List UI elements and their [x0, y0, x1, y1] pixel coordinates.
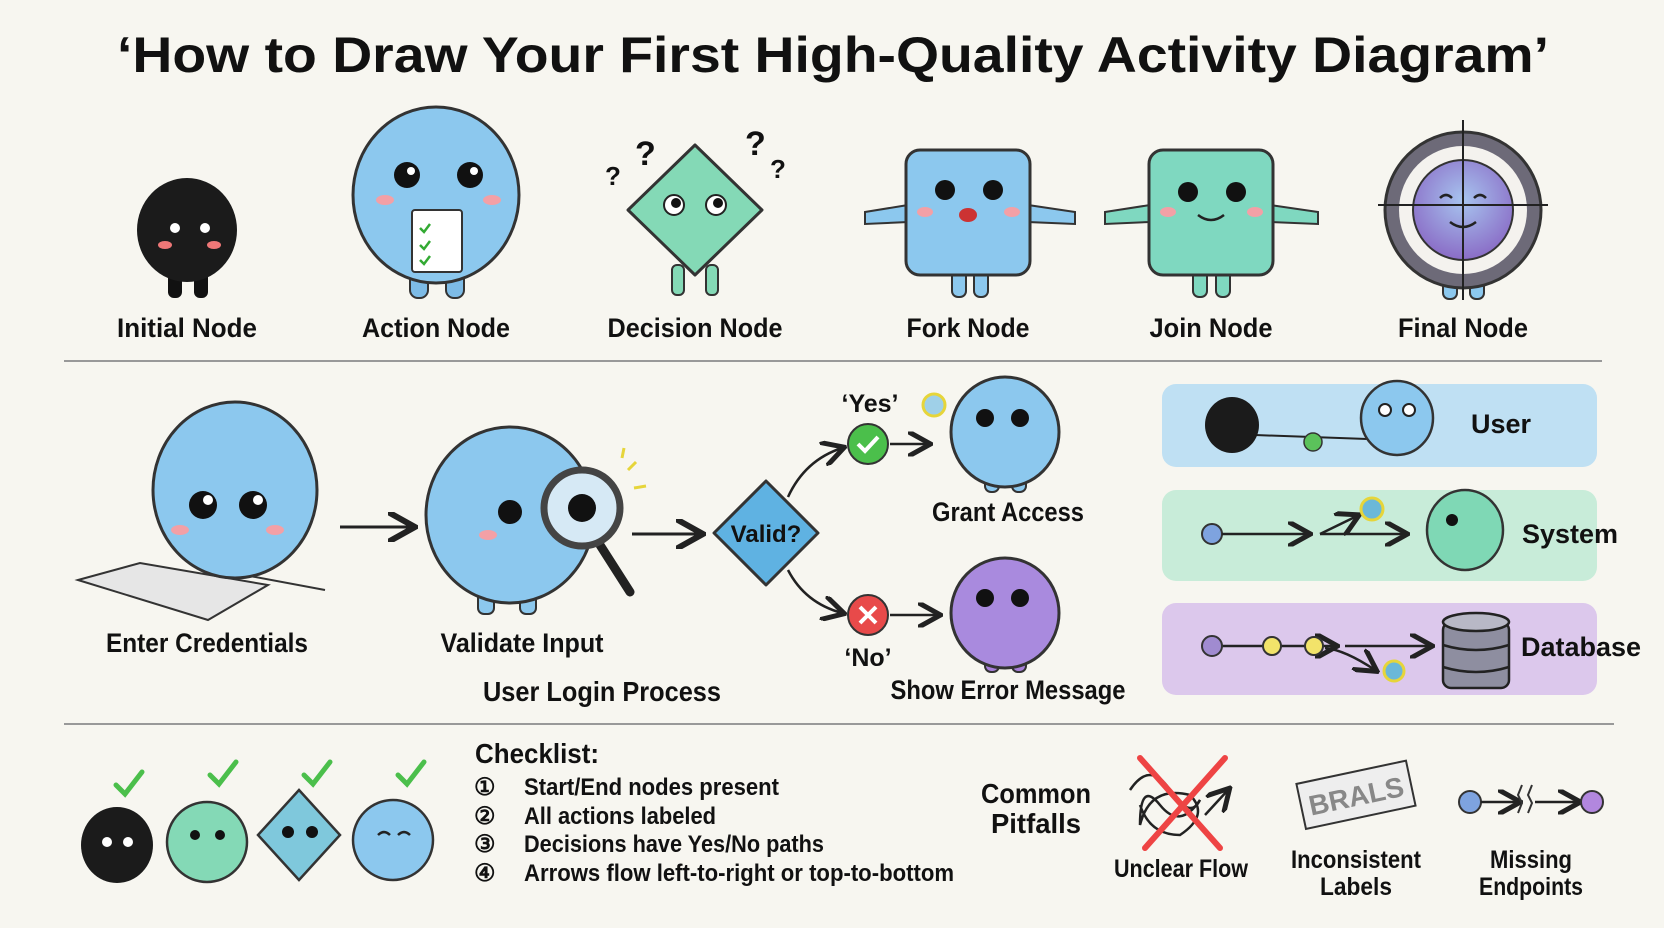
label: action node: Action Node — [362, 313, 510, 343]
common pitfalls: Common — [981, 778, 1091, 809]
character: validate input — [426, 427, 646, 614]
character: initial node — [137, 178, 237, 298]
checklist: Checklist: — [475, 738, 599, 769]
character: action node — [353, 107, 519, 298]
label: show error message: Show Error Message — [890, 675, 1126, 705]
icon: inconsistent labels: BRALS — [1306, 771, 1407, 821]
icon: unclear flow — [1130, 758, 1228, 848]
common pitfalls: Labels — [1320, 873, 1392, 901]
checklist: Arrows flow left-to-right or top-to-bottom — [524, 860, 954, 887]
character: decision node — [605, 125, 786, 295]
label: yes: ‘Yes’ — [842, 390, 898, 418]
arrow: yes branch — [788, 448, 842, 497]
lane: system — [1162, 490, 1618, 581]
checklist: ④ — [474, 860, 496, 887]
label: grant access: Grant Access — [932, 497, 1084, 527]
character: enter credentials — [78, 402, 325, 620]
label: user login process: User Login Process — [483, 676, 721, 707]
icon: inconsistent labels — [1296, 761, 1416, 829]
common pitfalls: Pitfalls — [991, 808, 1081, 839]
character: decision node: ? — [635, 135, 656, 173]
arrow: no branch — [788, 570, 842, 613]
checklist: Start/End nodes present — [524, 774, 779, 801]
label: final node: Final Node — [1398, 313, 1528, 343]
lane: database: Database — [1521, 632, 1641, 662]
lane: database — [1162, 603, 1641, 695]
character: decision node: ? — [605, 161, 621, 191]
label: decision node: Decision Node — [608, 313, 782, 343]
common pitfalls: Missing — [1490, 846, 1572, 874]
common pitfalls: Unclear Flow — [1114, 855, 1248, 883]
character: decision node: ? — [745, 125, 766, 163]
flow: user login process — [78, 377, 1126, 707]
checklist: All actions labeled — [524, 803, 716, 830]
icon: check — [848, 424, 888, 464]
bottom: checklist characters — [81, 762, 433, 883]
checklist: ① — [474, 774, 496, 801]
label: no: ‘No’ — [844, 644, 892, 672]
label: join node: Join Node — [1150, 313, 1272, 343]
swimlanes — [1162, 381, 1641, 695]
icon: cross — [848, 595, 888, 635]
lane: user — [1162, 381, 1597, 467]
arrow — [632, 532, 700, 536]
character: final node — [1378, 120, 1548, 300]
decision: valid?: Valid? — [731, 521, 801, 548]
character: show error — [951, 558, 1059, 672]
label: enter credentials: Enter Credentials — [106, 628, 308, 658]
character: join node — [1105, 150, 1318, 297]
character: decision node: ? — [770, 154, 786, 184]
node row — [117, 107, 1548, 343]
arrow — [340, 526, 412, 528]
label: initial node: Initial Node — [117, 313, 257, 343]
lane: user: User — [1471, 409, 1532, 439]
label: validate input: Validate Input — [440, 628, 604, 658]
common pitfalls: Endpoints — [1479, 873, 1583, 901]
common pitfalls: Inconsistent — [1291, 846, 1422, 874]
character: fork node — [865, 150, 1075, 297]
checklist: ② — [474, 803, 496, 830]
label: fork node: Fork Node — [906, 313, 1030, 343]
title: ‘How to Draw Your First High-Quality Activity Diagram’ — [117, 27, 1549, 83]
common pitfalls — [981, 758, 1603, 901]
checklist: Decisions have Yes/No paths — [524, 831, 824, 858]
character: grant access — [923, 377, 1059, 492]
checklist: ③ — [474, 831, 496, 858]
lane: system: System — [1522, 519, 1618, 549]
icon: missing endpoints — [1459, 785, 1603, 813]
checklist — [474, 738, 954, 887]
decision: valid? — [714, 481, 818, 585]
